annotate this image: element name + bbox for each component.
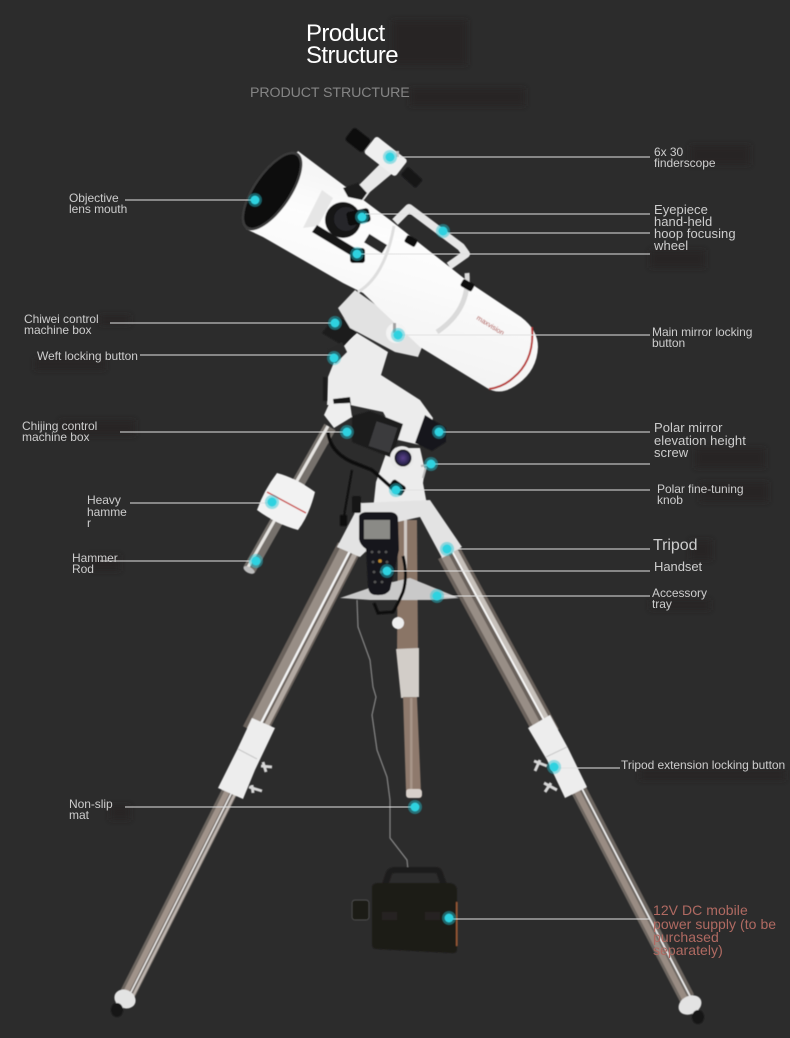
label: chijing control box: Chijing control [22, 419, 97, 433]
label: polar mirror screw: elevation height [654, 433, 746, 448]
title: Product [306, 20, 385, 47]
label: non-slip mat: mat [69, 808, 90, 822]
counterweight [257, 473, 315, 530]
finderscope [343, 127, 423, 200]
label: accessory tray: tray [652, 597, 672, 611]
callout dots [248, 150, 561, 925]
handle [395, 208, 466, 266]
label: hammer rod: Rod [72, 562, 94, 576]
left tripod leg [111, 546, 356, 1017]
telescope [230, 127, 538, 401]
fine-tuning knob [388, 478, 407, 497]
power cable [357, 600, 408, 870]
label: main mirror locking button: button [652, 336, 685, 350]
label: objective lens mouth: Objective [69, 191, 119, 205]
mount RA base [373, 448, 428, 510]
chiwei control box [322, 317, 358, 347]
RA coil cable [323, 377, 327, 401]
label: hammer rod: Hammer [72, 551, 118, 565]
label: finderscope: 6x 30 [654, 145, 683, 159]
mount column [327, 333, 433, 446]
label: tripod: Tripod [653, 537, 697, 554]
leader lines [100, 157, 650, 919]
label: polar mirror screw: screw [654, 445, 689, 460]
erased text smudges [35, 20, 785, 820]
label: weft locking button: Weft locking button [37, 349, 138, 363]
brand: maxvision [475, 315, 505, 337]
polar scope housing [415, 415, 446, 451]
accessory tray [340, 578, 459, 600]
label: main mirror locking button: Main mirror locking [652, 325, 752, 339]
optical tube [246, 151, 538, 392]
label: heavy hammer: r [87, 516, 91, 530]
label: power supply: 12V DC mobile [653, 902, 748, 918]
label: power supply: purchased [653, 929, 719, 945]
black tube knobs [404, 235, 418, 247]
latch [328, 342, 347, 363]
power supply [352, 870, 458, 953]
handset [359, 512, 406, 613]
label: objective lens mouth: lens mouth [69, 202, 127, 216]
centre tripod leg [392, 520, 422, 798]
label: accessory tray: Accessory [652, 586, 707, 600]
label: polar fine-tuning knob: knob [657, 493, 683, 507]
saddle plate [338, 290, 425, 357]
rear red band [489, 327, 532, 389]
label: power supply: power supply (to be [653, 916, 776, 932]
label: power supply: separately) [653, 942, 723, 958]
mouth [230, 142, 314, 240]
label: eyepiece: hand-held [654, 214, 712, 229]
label: handset: Handset [654, 559, 703, 574]
label: eyepiece: Eyepiece [654, 202, 708, 217]
label: chiwei control box: machine box [24, 323, 92, 337]
control box [352, 411, 403, 458]
motor cable [328, 432, 392, 488]
label: chijing control box: machine box [22, 430, 90, 444]
counterweight cone [324, 397, 352, 428]
mirror lock [386, 323, 406, 343]
label: non-slip mat: Non-slip [69, 797, 113, 811]
label: eyepiece: hoop focusing [654, 226, 736, 241]
polar screw [421, 464, 435, 478]
right tripod leg [445, 550, 705, 1024]
label: heavy hammer: Heavy [87, 493, 121, 507]
tripod head [337, 500, 462, 558]
tripod and mount product photo [111, 333, 705, 1024]
focuser [303, 190, 387, 263]
label: polar fine-tuning knob: Polar fine-tuning [657, 482, 744, 496]
label: eyepiece: wheel [653, 238, 688, 253]
title: Structure [306, 42, 398, 69]
label: heavy hammer: hamme [87, 505, 127, 519]
label: polar mirror screw: Polar mirror [654, 420, 722, 435]
label: finderscope: finderscope [654, 156, 716, 170]
polar scope lens [390, 446, 414, 470]
tube rings [358, 226, 394, 292]
label: tripod extension locking button: Tripod extension locking button [621, 758, 785, 772]
counterweight shaft [249, 427, 330, 570]
subtitle: PRODUCT STRUCTURE [250, 85, 410, 101]
label: chiwei control box: Chiwei control [24, 312, 99, 326]
